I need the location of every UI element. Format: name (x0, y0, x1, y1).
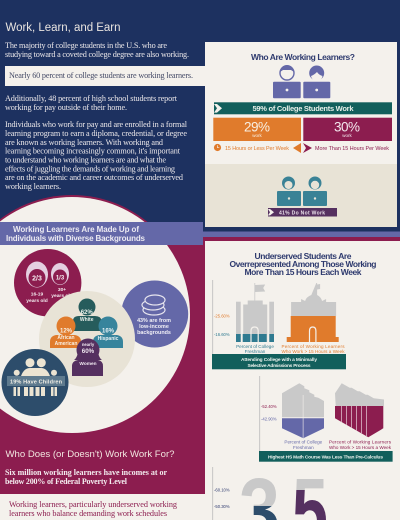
label: 16-19 years old: years old (26, 298, 48, 304)
banner: minimally selective admissions: Attending College with a Minimally (241, 357, 317, 363)
banner: 59 percent work: 59% of College Students Work (252, 104, 354, 113)
person: white 62 percent: 62% (81, 310, 93, 316)
caption: percent of working learners: Percent of Working Learners (282, 344, 345, 349)
panel: low income circle (121, 280, 188, 348)
person: Hispanic 16 percent: 16% (102, 328, 115, 334)
panel: navy intro background (0, 0, 400, 232)
person: white 62 percent (73, 298, 102, 331)
castle: working learners (287, 283, 339, 342)
person: women nearly 60 percent: 60% (82, 348, 95, 355)
text block: intro paragraph: studying toward a coveted college degree are also working. (5, 50, 189, 59)
heading bar: diverse backgrounds (0, 222, 203, 245)
person: African American 12 percent (50, 316, 81, 348)
panel: children circle (2, 349, 68, 416)
text block: intro paragraph (5, 41, 189, 59)
panel: who are working learners (205, 42, 397, 227)
text block: intro paragraph: The majority of college students in the U.S. who are (5, 41, 167, 50)
stat: 29 percent: work (252, 133, 262, 138)
heading bar: diverse backgrounds: Individuals with Diverse Backgrounds (6, 234, 146, 243)
banner: 59 percent work (214, 102, 392, 114)
icon: crimson arrow (303, 143, 312, 153)
label: 30+ years old: years old (51, 293, 73, 299)
chart: math course hexagons (259, 376, 393, 462)
big cream circle (0, 195, 191, 433)
hexagon: working learners (335, 383, 384, 437)
band: lavender extension (203, 232, 400, 237)
caption: percent of working learners: Percent of Working Learners (329, 440, 392, 444)
caption: percent of working learners: Who Work > 15 Hours a Week (282, 349, 345, 354)
label: 16-19 years old (26, 292, 48, 304)
banner: minimally selective admissions: Selective Admissions Process (248, 363, 311, 369)
label: 43 percent low-income (137, 318, 171, 336)
person: African American 12 percent: American (55, 341, 77, 347)
callout: underserved working learners: Working learners, particularly underserved working (9, 500, 177, 509)
castle: college freshmen (236, 283, 274, 342)
icon: head 1/3: 1/3 (56, 276, 65, 282)
person: women nearly 60 percent (72, 338, 103, 376)
text block: definition of working learners: to understand who working learners are and what the (5, 156, 166, 164)
heading: overrepresented (230, 251, 376, 277)
label: 30+ years old: 30+ (58, 287, 66, 293)
chart axis: big numbers (212, 467, 230, 520)
text block: definition of working learners (5, 120, 188, 191)
icon: clock (214, 144, 221, 151)
label: 43 percent low-income: low-income (139, 324, 169, 330)
panel: crimson lower left background (0, 237, 205, 494)
label: 19 percent have children: 19% Have Children (10, 380, 63, 386)
banner: 41 percent do not work: 41% Do Not Work (279, 211, 325, 217)
person: women nearly 60 percent: nearly (82, 342, 95, 347)
panel: race and gender circle (39, 291, 135, 387)
banner: highest math course: Highest HS Math Course Was Less Than Pre-Calculus (268, 454, 383, 460)
label: 30+ years old (51, 287, 73, 299)
text block: high school students (5, 94, 178, 112)
text block: high school students: Additionally, 48 percent of high school students report (5, 94, 178, 103)
icon: orange arrow (293, 143, 301, 153)
icon: two non-working students (277, 176, 327, 206)
stat: 30 percent: work (342, 133, 352, 138)
text block: six million working learners (5, 468, 167, 486)
chart: selective admissions castles (212, 280, 346, 369)
stat: 29 percent: 29% (244, 120, 270, 135)
icon: family (14, 358, 57, 396)
person: women nearly 60 percent: Women (79, 361, 97, 367)
text block: high school students: working for pay outside of their home. (5, 103, 127, 112)
icon: two students at laptops (273, 65, 330, 98)
label: more than 15 hours: More Than 15 Hours Per Week (315, 146, 389, 152)
crimson band over right panel (203, 237, 400, 241)
stat: 30 percent: 30% (334, 120, 360, 135)
person: Hispanic 16 percent: Hispanic (98, 336, 119, 342)
heading: who are working learners: Who Are Working Learners? (251, 52, 355, 62)
caption: percent of college freshman (236, 344, 274, 354)
axis label: 60.10 percent: -60.10% (214, 488, 230, 492)
banner: 41 percent do not work (268, 208, 337, 217)
caption: percent of working learners: Who Work > 15 Hours a Week (329, 445, 392, 450)
label: 16-19 years old: 16-19 (31, 292, 44, 298)
heading: overrepresented: Overrepresented Among Those Working (230, 259, 376, 269)
axis label: 50.30 percent: -50.30% (214, 504, 230, 509)
text block: definition of working learners: learning becoming increasingly common, it's important (5, 147, 181, 156)
icon: head 2/3: 2/3 (32, 276, 42, 282)
callout: nearly 60 percent: Nearly 60 percent of college students are working learners. (9, 71, 193, 80)
icon: coins (142, 295, 165, 315)
callout: nearly 60 percent (5, 66, 205, 86)
axis label: 25.60 percent: -25.60% (214, 314, 230, 318)
text block: definition of working learners: are on the academic and career outcomes of underserved (5, 173, 183, 182)
caption: percent of college freshman: Percent of College (236, 344, 274, 349)
text block: six million working learners: below 200% of Federal Poverty Level (5, 477, 128, 486)
panel: age circle (14, 249, 81, 316)
caption: percent of college freshman: Percent of College (284, 440, 323, 444)
label: 15 hours or less: 15 Hours or Less Per Week (225, 146, 289, 152)
panel: underserved students (205, 241, 400, 520)
text block: definition of working learners: Individuals who work for pay and are enrolled in a formal (5, 120, 188, 129)
person: African American 12 percent: African (57, 335, 75, 341)
axis label: 16.60 percent: -16.60% (214, 332, 230, 337)
stat: 30 percent (303, 118, 392, 141)
label: 43 percent low-income: backgrounds (137, 330, 171, 336)
heading bar: diverse backgrounds: Working Learners Are Made Up of (13, 225, 139, 234)
caption: percent of working learners (282, 344, 345, 354)
callout: underserved working learners (5, 494, 206, 520)
axis label: 52.40 percent: -52.40% (261, 404, 277, 409)
text block: definition of working learners: working learners. (5, 182, 61, 191)
person: African American 12 percent: 12% (60, 328, 73, 334)
caption: percent of working learners (329, 440, 392, 450)
heading: overrepresented: More Than 15 Hours Each Week (244, 267, 362, 277)
stat: 29 percent (213, 118, 301, 141)
person: Hispanic 16 percent (93, 316, 123, 348)
callout: underserved working learners: learners who balance demanding work schedules (9, 509, 167, 518)
hexagon: college freshmen (282, 383, 324, 438)
caption: percent of college freshman: Freshman (245, 349, 266, 354)
text block: definition of working learners: learning program to earn a diploma, credential, or degree (5, 129, 187, 138)
heading: who does or doesn't work work for: Who Does (or Doesn't) Work Work For? (6, 449, 174, 460)
banner: minimally selective admissions (212, 354, 346, 369)
text block: definition of working learners: are known as working learners. With working and (5, 138, 163, 147)
caption: percent of college freshman: Freshman (293, 445, 314, 450)
text block: definition of working learners: effects of juggling the demands of working and learning (5, 164, 175, 174)
axis label: 42.90 percent: -42.90% (261, 417, 277, 422)
person: white 62 percent: White (80, 317, 94, 323)
heading: overrepresented: Underserved Students Are (254, 251, 352, 261)
caption: percent of college freshman (284, 440, 323, 450)
heading: Work, Learn, and Earn: Work, Learn, and Earn (6, 22, 120, 34)
text block: six million working learners: Six million working learners have incomes at or (5, 468, 167, 477)
label: 43 percent low-income: 43% are from (137, 318, 171, 324)
